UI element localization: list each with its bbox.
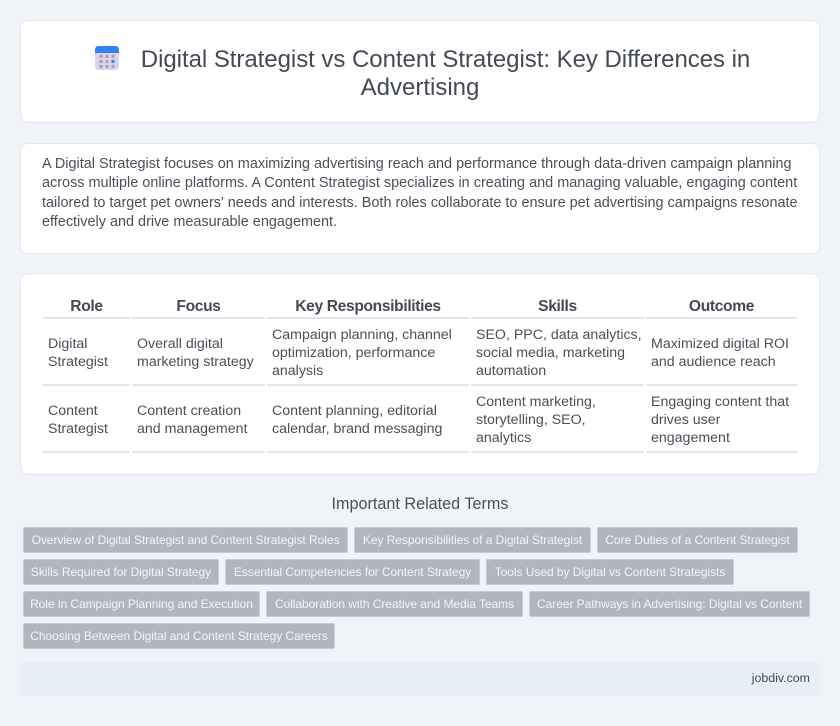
table header: Outcome — [689, 298, 754, 315]
table row: Digital Strategist: optimization, performance — [272, 345, 435, 361]
table row: Content Strategist: Content creation — [137, 403, 241, 419]
related term tags — [23, 527, 810, 649]
table row: Digital Strategist: automation — [476, 363, 546, 379]
table row: Digital Strategist: social media, marketing — [476, 345, 625, 361]
table header: Role — [70, 298, 103, 315]
related term tags: Choosing Between Digital and Content Strategy Careers — [30, 629, 328, 643]
table row: Digital Strategist: Campaign planning, channel — [272, 327, 452, 343]
related term tags: Collaboration with Creative and Media Teams — [275, 597, 514, 611]
intro text — [42, 156, 798, 230]
table row: Content Strategist: Content marketing, — [476, 394, 596, 410]
title: Digital Strategist vs Content Strategist: Key Differences in — [141, 46, 750, 73]
table header: Focus — [176, 298, 221, 315]
table row: Content Strategist: analytics — [476, 430, 531, 446]
table row: Content Strategist: storytelling, SEO, — [476, 412, 586, 428]
table row: Digital Strategist: and audience reach — [651, 354, 776, 370]
title: Advertising — [361, 74, 479, 101]
table header: Skills — [538, 298, 577, 315]
related term tags: Skills Required for Digital Strategy — [31, 565, 211, 579]
heading: related terms: Important Related Terms — [332, 495, 508, 513]
table row: Content Strategist: Engaging content that — [651, 394, 789, 410]
title — [141, 46, 750, 101]
table row: Digital Strategist: Overall digital — [137, 336, 223, 352]
intro text: across multiple online platforms. A Content Strategist specializes in creating and managing valuable, engaging content — [42, 175, 797, 191]
table row: Digital Strategist: Maximized digital ROI — [651, 336, 789, 352]
table row: Digital Strategist: SEO, PPC, data analytics, — [476, 327, 642, 343]
panel: intro — [20, 143, 820, 254]
table row: Digital Strategist: Strategist — [48, 354, 108, 370]
related term tags: Tools Used by Digital vs Content Strategists — [495, 565, 725, 579]
table row: Content Strategist — [48, 394, 789, 446]
related term tags: Role in Campaign Planning and Execution — [30, 597, 253, 611]
related term tags: Career Pathways in Advertising: Digital vs Content — [537, 597, 802, 611]
table row: Content Strategist: engagement — [651, 430, 730, 446]
table row: Content Strategist: and management — [137, 421, 247, 437]
related term tags: Overview of Digital Strategist and Content Strategist Roles — [32, 533, 339, 547]
intro text: tailored to target pet owners' needs and interests. Both roles collaborate to ensure pet advertising campaigns resonate — [42, 195, 798, 211]
footer bar — [20, 662, 820, 696]
related term tags: Key Responsibilities of a Digital Strategist — [363, 533, 582, 547]
table header: Key Responsibilities — [295, 298, 441, 315]
panel: comparison table — [20, 273, 820, 475]
intro text: A Digital Strategist focuses on maximizing advertising reach and performance through data-driven campaign planning — [42, 156, 792, 172]
header panel — [20, 20, 820, 123]
table row: Digital Strategist: analysis — [272, 363, 323, 379]
table row: Digital Strategist: Digital — [48, 336, 87, 352]
icon: calendar — [95, 46, 119, 70]
table row: Content Strategist: Content — [48, 403, 98, 419]
footer source text: jobdiv.com — [752, 671, 810, 685]
table row: Digital Strategist — [48, 327, 789, 379]
related term tags: Essential Competencies for Content Strategy — [234, 565, 471, 579]
table header — [70, 298, 754, 315]
intro text: effectively and drive measurable engagement. — [42, 214, 337, 230]
related term tags: Core Duties of a Content Strategist — [605, 533, 790, 547]
table row: Digital Strategist: marketing strategy — [137, 354, 254, 370]
table row: Content Strategist: Content planning, editorial — [272, 403, 437, 419]
table row: Content Strategist: drives user — [651, 412, 720, 428]
table row: Content Strategist: Strategist — [48, 421, 108, 437]
table row: Content Strategist: calendar, brand messaging — [272, 421, 442, 437]
